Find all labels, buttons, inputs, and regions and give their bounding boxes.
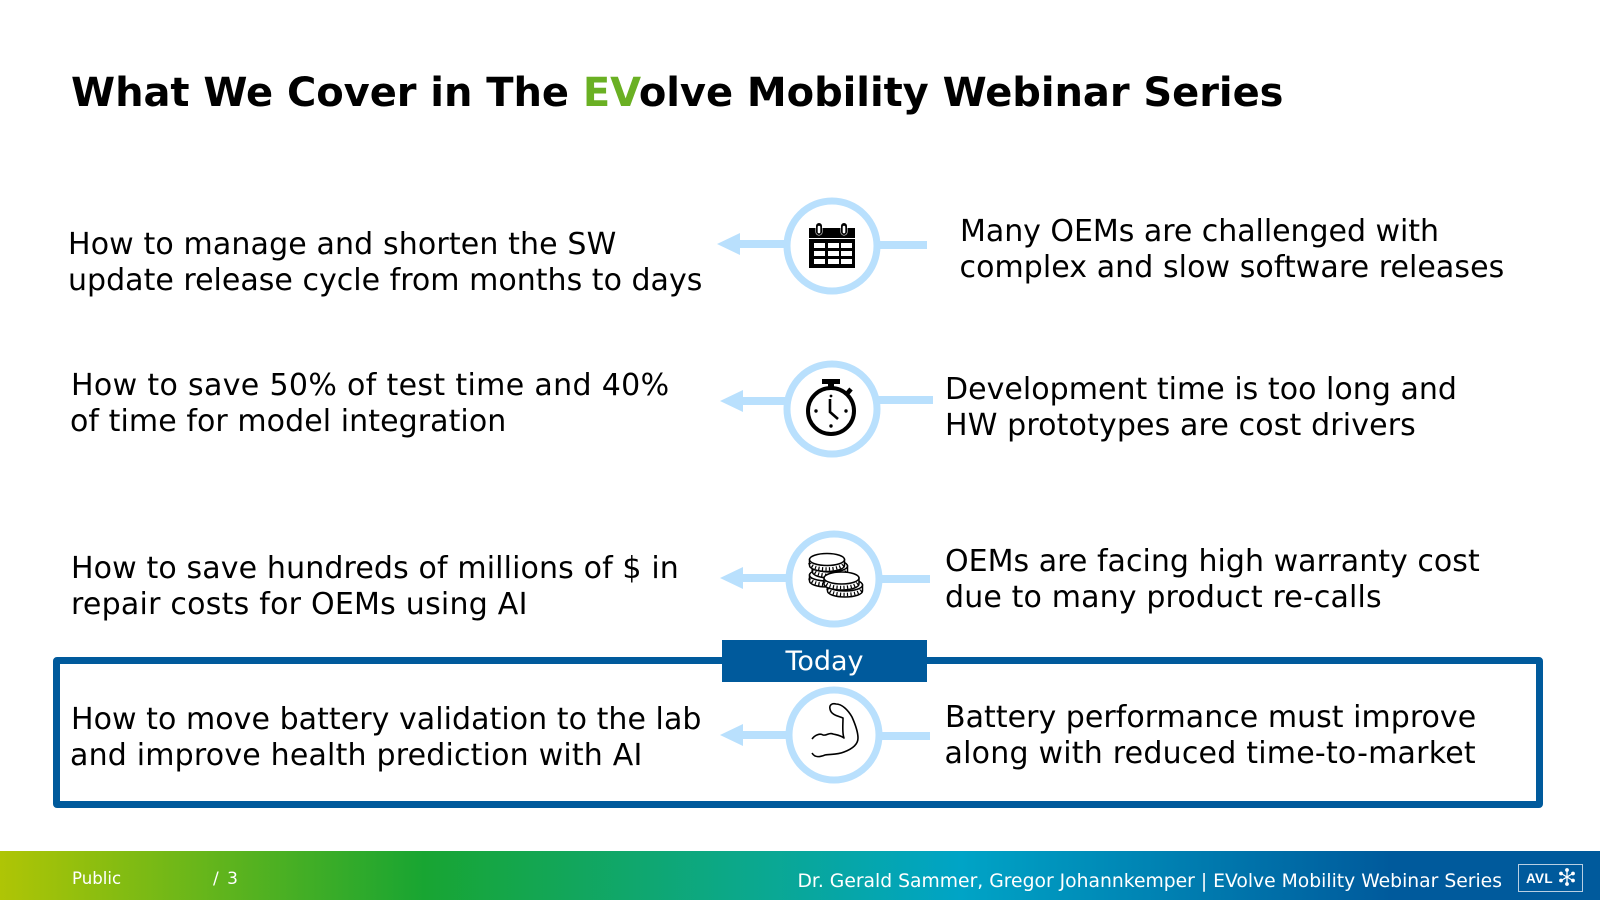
footer: page number: / 3 bbox=[213, 869, 238, 889]
text: solution 4: How to move battery validation to the lab bbox=[71, 702, 701, 737]
text: problem 2: Development time is too long and bbox=[945, 372, 1457, 407]
icon: flexed arm bbox=[812, 704, 858, 757]
text: problem 3 bbox=[945, 544, 1480, 615]
text: solution 4 bbox=[70, 702, 701, 773]
text: problem 1: Many OEMs are challenged with bbox=[960, 214, 1439, 249]
row 4 connector: arrow, ring, line bbox=[720, 690, 930, 780]
today label: Today bbox=[785, 646, 864, 677]
row 3 connector: arrow, ring, line bbox=[720, 534, 930, 624]
title: What We Cover in The EVolve Mobility Webinar Series bbox=[71, 70, 1283, 116]
text: problem 4 bbox=[944, 700, 1476, 771]
today label bbox=[722, 640, 927, 682]
icon: coins bbox=[810, 554, 862, 597]
text: problem 4: Battery performance must improve bbox=[945, 700, 1476, 735]
highlight frame bbox=[52, 657, 1543, 808]
text: solution 1: update release cycle from months to days bbox=[68, 263, 702, 298]
logo: AVL: AVL bbox=[1526, 871, 1553, 886]
text: solution 3: repair costs for OEMs using AI bbox=[71, 587, 528, 622]
row 1 connector: arrow, ring, line bbox=[717, 201, 927, 291]
text: solution 4: and improve health prediction with AI bbox=[70, 738, 642, 773]
text: problem 1: complex and slow software releases bbox=[960, 250, 1504, 285]
text: problem 4: along with reduced time-to-market bbox=[944, 736, 1476, 771]
text: solution 1 bbox=[68, 227, 702, 298]
text: solution 2 bbox=[70, 368, 669, 439]
icon: stopwatch bbox=[808, 379, 854, 434]
text: problem 2: HW prototypes are cost drivers bbox=[945, 408, 1416, 443]
footer: presenters and series: Dr. Gerald Sammer, Gregor Johannkemper | EVolve Mobility Webinar Series bbox=[797, 871, 1502, 892]
text: solution 3: How to save hundreds of millions of $ in bbox=[71, 551, 679, 586]
text: problem 3: due to many product re-calls bbox=[945, 580, 1382, 615]
text: solution 2: How to save 50% of test time and 40% bbox=[71, 368, 669, 403]
icon: calendar bbox=[809, 226, 855, 268]
footer gradient bar bbox=[0, 851, 1600, 900]
text: solution 3 bbox=[71, 551, 679, 622]
footer: classification: Public bbox=[72, 869, 121, 888]
row 2 connector: arrow, ring, line bbox=[720, 364, 933, 454]
text: solution 2: of time for model integration bbox=[70, 404, 506, 439]
text: problem 2 bbox=[945, 372, 1457, 443]
text: problem 1 bbox=[960, 214, 1504, 285]
text: solution 1: How to manage and shorten the SW bbox=[68, 227, 616, 262]
text: problem 3: OEMs are facing high warranty cost bbox=[945, 544, 1480, 579]
logo: AVL bbox=[1518, 864, 1583, 892]
